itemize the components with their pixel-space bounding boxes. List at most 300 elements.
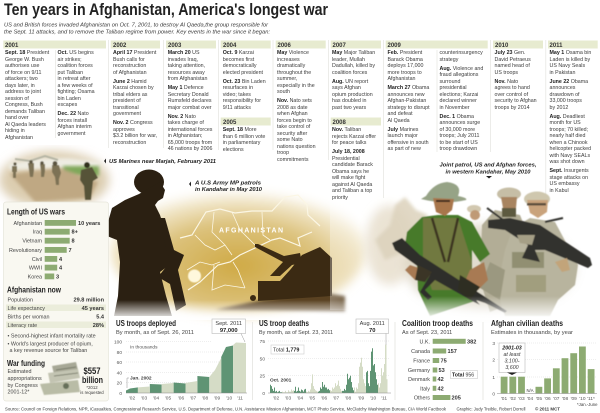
chart: US troops deployed: '03 [141,396,147,402]
timeline year headers: 2002 [113,43,127,49]
timeline: 2011: nearly half died [550,133,585,139]
timeline: 2002: reconstruction [113,140,146,146]
bar chart: length of wars: Revolutionary [9,248,42,254]
timeline: 2002: reconstruction [113,63,146,69]
timeline: 2003: in Afghanistan; [168,133,202,139]
chart: coalition troop deaths: Canada [411,349,430,355]
timeline: 2006: some Nato [277,137,303,143]
timeline: 2001 column two: Oct. US begins [58,50,94,56]
caption: MP patrols: in Kandahar in May 2010 [195,187,263,193]
timeline: 2009 column two: strategy [440,56,458,62]
timeline: 2006: dramatically [277,63,305,69]
timeline: 2001 column one: Al Qaeda leaders [5,122,46,128]
total: $557 billion [80,366,104,395]
footnote: *Jan.-June [577,402,598,407]
table: Afghanistan now: 29.8 million [74,298,105,304]
timeline: 2007: says Afghan [332,85,361,91]
timeline: 2007: Dadullah, killed by [332,63,375,69]
chart: coalition troop deaths: 42 [438,386,444,392]
chart: Afghan civilian deaths: '05 [536,396,542,402]
timeline: 2002: president of [113,98,141,104]
bar chart: length of wars: 8 [72,239,75,245]
chart: Afghan civilian deaths: 1 [492,375,495,381]
timeline year headers: 2001 [5,43,19,49]
timeline: 2010: July 23 Gen. [494,50,525,56]
timeline: 2007: leader, Mullah [332,56,365,62]
timeline: 2003: invades Iraq, [168,56,198,62]
timeline: 2006: throughout the [277,70,311,76]
silhouette of armoured vehicle [250,244,332,301]
callout: 2001-03: at least [503,352,521,358]
chart: US troop deaths: '11 [381,396,387,402]
chart: US troops deployed: '10 [226,396,232,402]
timeline: 2009 column one: announces new [388,92,425,98]
chart: coalition troop deaths: 382 [467,339,476,345]
timeline: 2009 column two: announces surge [440,120,480,126]
timeline: 2007: coalition forces [332,70,367,76]
timeline: 2001 column one: George W. Bush [5,56,44,62]
annotation: Oct. 2001: Oct. 2001 [270,378,292,384]
chart: US troops deployed: '11 [237,396,243,402]
chart: US troop deaths: '04 [297,396,303,402]
timeline: 2002: approves [113,126,135,132]
timeline: 2003: May 1 Defence [168,85,204,91]
chart: Afghan civilian deaths: '07 [553,396,560,402]
timeline: 2004: becomes first [223,56,254,62]
bar chart: length of wars: 4 [59,266,63,272]
timeline: 2001 column two: government [58,130,85,136]
timeline: 2001 column two: in retreat after [58,76,90,82]
timeline: 2011: by 2012 [550,104,568,110]
timeline: 2009 column one: Barack Obama [388,56,423,62]
timeline: 2006: take control of [277,124,310,130]
timeline: 2008: Obama says he [332,168,369,174]
timeline: 2005: than 6 million vote [223,134,265,140]
timeline: 2011: month for US [550,120,581,126]
timeline: 2008: rejects Karzai offer [332,134,376,140]
timeline: 2006: summer, [277,76,297,82]
timeline year headers: 2003 [168,43,182,49]
timeline: 2008: Presidential [332,156,360,162]
timeline: 2001 column one: authorises use [5,63,39,69]
text: appropriations [8,369,42,396]
subheading: By month, as of Sept. 26, 2011 [116,330,194,336]
timeline: 2004: video; takes [223,92,251,98]
timeline: 2006: Nov. Nato sets [277,98,312,104]
bar chart: length of wars: Iraq [33,230,42,236]
timeline: 2007: Aug. UN report [332,78,368,84]
timeline: 2001 column one: Congress, Bush [5,102,43,108]
timeline: 2001 column two: forces install [58,118,87,124]
bullet notes [8,334,96,354]
callout: Aug. 2011: Aug. 2011 [360,321,385,327]
bullet notes: • Second-highest infant mortality rate [8,334,96,340]
timeline: 2001 column one: hand over [5,115,29,121]
chart: US troops deployed: 0 [119,391,122,397]
timeline: 2009 column one: Al Qaeda [388,118,410,124]
total: $557 billion: billion [82,375,103,385]
timeline: 2011: stage attacks on [550,174,588,180]
table: Afghanistan now: 45 years [82,306,104,312]
chart: coalition troop deaths: 75 [440,358,447,364]
timeline: 2011: drawdown of [550,92,580,98]
subheading: As of Sept. 23, 2011 [402,330,452,336]
caption: joint patrol: in western Kandahar, May 2010 [446,169,531,175]
timeline: 2001 column one: Afghanistan [5,134,33,140]
chart: Afghan civilian deaths: '01 [501,396,507,402]
chart: US troops deployed: '05 [165,396,171,402]
callout: 2001-03 [499,343,525,375]
timeline: 2009 column one: offensive in south [388,140,429,146]
timeline: 2004: democratically [223,63,257,69]
timeline: 2010: Nov. Nato [494,78,518,84]
caption: MP patrols: A U.S Army MP patrols [194,180,261,186]
bar chart: length of wars: WWII [29,266,42,272]
heading: Afghanistan now: Afghanistan now [7,284,61,294]
timeline: 2010: named head of [494,63,530,69]
chart: US troops deployed: '02 [129,396,135,402]
chart: coalition troop deaths: 42 [438,377,444,383]
timeline: 2004: Oct. 23 Bin Laden [223,78,266,84]
chart: US troop deaths: '08 [345,396,351,402]
timeline: 2002: Bush calls for [113,56,145,62]
timeline: 2001 column one: session of [5,96,29,102]
timeline: 2010: over control of [494,92,528,98]
heading: Afghan civilian deaths [491,318,563,328]
chart: Afghan civilian deaths: '04 [527,396,533,402]
bar chart: length of wars: Civil [32,257,42,263]
timeline: 2008: will make fight [332,175,365,181]
timeline: 2006: commitments [277,156,308,162]
chart: Afghan civilian deaths: '06 [544,396,551,402]
timeline: 2001 column two: a few weeks of [58,82,93,88]
bar chart: length of wars: Vietnam [22,239,42,245]
timeline: 2004: resurfaces in [223,85,253,91]
timeline: 2009 column two: surround [440,78,460,84]
timeline year headers: 2010 [495,43,509,49]
heading: Length of US wars: Length of US wars [7,206,65,216]
chart: US troop deaths [259,318,391,402]
heading: War funding: War funding [7,358,45,368]
chart: coalition troop deaths: Others [414,396,430,402]
heading: US troops deployed [116,318,176,328]
timeline: 2001 column two: air strikes; [58,56,82,62]
label: Afghanistan: AFGHANISTAN [219,228,283,234]
heading: Coalition troop deaths [402,318,473,328]
timeline: 2001 column one: days later, in [5,82,35,88]
timeline: 2001 column two: Dec. 22 Nato [58,111,89,117]
timeline: 2011 [550,50,591,194]
timeline: 2009 column two: to be start of US [440,140,478,146]
timeline: 2006: increases [277,56,300,62]
map of Afghanistan [180,195,320,290]
caption: joint patrol [440,162,537,178]
heading: US troop deaths [259,318,309,328]
chart: coalition troop deaths: Italy [420,386,430,392]
timeline: 2008: against Al Qaeda [332,182,372,188]
timeline: 2009 column one: Afghanistan [388,76,415,82]
timeline: 2010: US troops [494,70,518,76]
timeline: 2009 column one [388,50,430,152]
chart: US troops deployed: 40 [117,370,122,376]
bar chart: length of wars [9,220,100,280]
timeline: 2003 [168,50,212,152]
callout: 2001-03: 3,100- [504,358,520,364]
timeline: 2007: past two years [332,104,366,110]
source line: Source: Council on Foreign Relations, NPR, iCasualties, Congressional Research Service, U.S. Department of Defense, U.N. Assistance Mission Afghanistan, MCT Photo Service, McClatchy Washington Bureau, CIA World Factbook [5,406,447,412]
photo: US Marines near Marjah [0,151,109,209]
timeline: 2006: forces begin to [277,118,312,124]
chart: Afghan civilian deaths: 2 [492,358,495,364]
timeline: 2006: 2008 as date [277,104,308,110]
soldier right 1 [480,210,530,312]
chart: US troops deployed: '04 [153,396,159,402]
photo: soldier silhouette and Afghanistan map [90,170,366,320]
chart: Afghan civilian deaths: 0 [492,392,495,398]
timeline: 2010 [494,50,537,110]
subheading: Estimates in thousands, by year [491,330,573,336]
callout: Aug. 2011 [356,319,388,345]
timeline: 2011: in Kabul [550,188,569,194]
callout: Sept. 2011 [212,319,246,342]
timeline: 2003: taking attention, [168,63,205,69]
timeline: 2003: major combat over [168,104,212,110]
chart: US troops deployed: '09 [214,396,220,402]
timeline: 2011: US embassy [550,181,580,187]
chart: coalition troop deaths: France [413,358,430,364]
total: $557 billion: $557 [84,366,100,376]
timeline: 2009 column one: March 27 Obama [388,85,429,91]
timeline: 2009 column two: troop drawdown [440,146,477,152]
timeline: 2001 column one: demands Taliban [5,108,45,114]
timeline: 2007: opium production [332,92,373,98]
timeline: 2003: international forces [168,126,212,132]
intro text [4,22,270,36]
timeline: 2001 column two [58,50,95,136]
timeline: 2001 column one: attackers; two [5,76,38,82]
chart: Afghan civilian deaths: '08 [562,396,568,402]
bar chart: length of wars: 8+ [72,230,79,236]
photo: joint patrol soldiers [365,182,592,316]
caption: joint patrol: Joint patrol, US and Afghan forces, [440,162,537,168]
chart: coalition troop deaths: 157 [448,349,457,355]
chart: coalition troop deaths: U.K. [420,339,430,345]
bullet notes: a key revenue source for Taliban [10,348,87,354]
timeline: 2008 [332,127,376,200]
timeline: 2011: when a Chinook [550,140,588,146]
timeline: 2011: helicopter packed [550,146,591,152]
timeline: 2011: US Navy Seals [550,63,585,69]
timeline: 2002: of Afghanistan [113,70,147,76]
table: Afghanistan now [6,298,106,329]
table: Afghanistan now: Life expectancy [8,306,45,312]
soldier right 2 [497,218,578,316]
rifles [392,238,507,313]
timeline: 2001 column two: fighting; Osama [58,89,95,95]
timeline: 2002: transitional [113,104,139,110]
timeline year headers: 2009 [388,43,402,49]
timeline: 2009 column two: declared winner [440,98,477,104]
timeline: 2010: agrees to hand [494,85,530,91]
title: Ten years in Afghanistan, America's longest war [4,1,328,19]
timeline: 2001 column one: address to joint [5,89,41,95]
timeline: 2008: and Taliban a top [332,188,372,194]
bar chart: length of wars: Afghanistan [14,221,42,227]
callout: Sept. 2011: Sept. 2011 [215,321,242,327]
timeline: 2007: May Major Taliban [332,50,375,56]
timeline: 2009 column one: strategy to disrupt [388,104,430,110]
timeline: 2001 column two: Afghan interim [58,124,92,130]
timeline: 2001 column two: escapes [58,102,77,108]
timeline: 2008: priority [332,194,348,200]
chart: coalition troop deaths: 205 [452,396,461,402]
timeline: 2009 column two: presidential [440,85,467,91]
intro text: US and British forces invaded Afghanistan on Oct. 7, 2001, to destroy Al Qaeda,the group responsible for [4,22,269,28]
chart: Afghan civilian deaths: '10 [579,396,586,402]
timeline: 2006: troop [277,150,289,156]
chart: US troops deployed: In thousands [130,344,158,350]
timeline: 2011: May 1 Osama bin [550,50,591,56]
timeline: 2009 column two: elections; Karzai [440,92,478,98]
timeline: 2003: from Afghanistan [168,76,207,82]
timeline: 2004 [222,50,266,110]
chart: coalition troop deaths: 53 [438,368,445,374]
timeline: 2009 column two: troops; July 2011 [440,133,479,139]
caption: Marines: US Marines near Marjah, February 2011 [109,159,216,165]
timeline: 2009 column one: Feb. President [388,50,422,56]
panel: sidebar [4,202,108,401]
chart: US troop deaths: 75 [260,339,265,345]
timeline: 2002: government [113,111,141,117]
timeline: 2006 [277,50,316,162]
timeline: 2006: south [277,89,290,95]
timeline: 2009 column two: of 30,000 more [440,126,475,132]
timeline: 2011: Aug. Deadliest [550,114,585,120]
chart: US troops deployed: 20 [117,380,122,386]
timeline: 2006: security after [277,130,307,136]
chart: US troops deployed [114,318,247,402]
chart: US troop deaths: '09 [358,396,364,402]
chart: US troop deaths: '07 [333,396,339,402]
text: appropriations: appropriations [8,376,42,382]
callout: total deaths: Total 1,779 [273,348,299,354]
timeline: 2008: for peace talks [332,140,366,146]
timeline: 2006: May Violence [277,50,309,56]
timeline: 2009 column one: July Marines [388,126,418,132]
callout: total: Total 956 [452,372,474,378]
chart: US troop deaths: '06 [321,396,327,402]
timeline year headers: 2004 [223,43,237,49]
bar chart: length of wars: Korea [28,274,42,280]
timeline year headers: 2011 [550,43,563,49]
timeline: 2001 column one [5,50,50,140]
callout: 2001-03: 2001-03 [501,346,522,352]
timeline: 2002 [113,50,157,146]
timeline: 2005: elections [223,146,244,152]
timeline: 2003: resources away [168,70,205,76]
chart: Afghan civilian deaths: '03 [518,396,525,402]
timeline: 2011: was shot down [550,159,585,165]
chart: coalition troop deaths: Germany [408,368,430,374]
timeline: 2001 column one: of force on 9/11 [5,70,41,76]
timeline: 2011: June 22 Obama [550,78,588,84]
timeline: 2011: troops; 70 killed; [550,126,588,132]
timeline: 2003: 46 nations by 2006 [168,146,212,152]
icon: dollar bills [40,362,80,395]
timeline: 2010: David Petraeus [494,56,531,62]
bullet notes: • World's largest producer of opium, [8,342,93,348]
text: appropriations: by Congress [8,383,38,389]
timeline: 2011: with Navy SEALs [550,152,590,158]
table: Afghanistan now: 5.4 [96,314,105,320]
chart: Afghan civilian deaths: '09 [571,396,577,402]
soldier centre [405,215,490,316]
timeline: 2009 column two: in November [440,104,470,110]
chart: US troop deaths: 50 [260,356,265,362]
soldier silhouette [102,170,186,316]
chart: US troops deployed: '08 [202,396,208,402]
timeline: 2001 column two: put Taliban [58,70,83,76]
bar chart: length of wars: 7 [68,248,72,254]
chart: Afghan civilian deaths: '02 [510,396,516,402]
timeline: 2008: July 18, 2008 [332,149,365,155]
total: $557 billion: *2012 [86,385,98,390]
text: appropriations: Estimated [8,369,31,375]
caption: MP patrols [189,180,263,193]
chart: US troop deaths: '05 [309,396,315,402]
chart: US troop deaths: '02 [273,396,279,402]
timeline: 2009 column one: and defeat [388,111,413,117]
timeline: 2002: tribal elders as [113,92,147,98]
timeline: 2011: Laden is killed by [550,56,590,62]
chart: Afghan civilian deaths: '11* [587,396,595,402]
timeline: 2009 column one: Afghan-Pakistan [388,98,426,104]
timeline: 2008: Nov. Taliban [332,127,361,133]
timeline: 2011: 33,000 troops [550,98,582,104]
timeline: 2010: security to Afghan [494,98,537,104]
total: $557 billion: is requested [80,390,104,395]
timeline: 2009 column one: more troops to [388,70,422,76]
timeline: 2002: June 2 Hamid [113,78,147,84]
timeline year headers [3,40,598,198]
timeline: 2009 column two: fraud allegations [440,72,478,78]
subheading: By month, as of Sept. 23, 2011 [259,330,333,336]
source line: Graphic: Judy Treible, Robert Dorrell [456,406,526,412]
chart: Afghan civilian deaths: 3 [492,341,495,347]
chart: Afghan civilian deaths [491,318,598,407]
bar chart: length of wars: 4 [59,257,63,263]
callout: Aug. 2011: 70 [369,328,375,334]
timeline: 2008: candidate Barack [332,162,373,168]
timeline: 2011: announces [550,85,575,91]
timeline: 2004: elected president [223,70,263,76]
callout: Sept. 2011: 97,000 [220,328,238,334]
timeline: 2002: April 17 President [113,50,156,56]
timeline: 2005 [222,127,266,152]
timeline: 2007 [332,50,375,110]
timeline: 2009 column two: Aug. Violence and [440,66,483,72]
timeline: 2007: has doubled in [332,98,366,104]
timeline: 2005: Sept. 18 More [223,127,257,133]
timeline: 2002: Nov. 2 Congress [113,120,153,126]
timeline: 2003: Secretary Donald [168,92,209,98]
timeline: 2009 column one: as part of new [388,146,421,152]
label: N/A: N/A [527,388,534,393]
chart: US troops deployed: 80 [117,350,122,356]
timeline: 2003: 65,000 troops from [168,140,212,146]
chart: coalition troop deaths [402,318,478,402]
source line: © 2011 MCT [535,406,560,412]
